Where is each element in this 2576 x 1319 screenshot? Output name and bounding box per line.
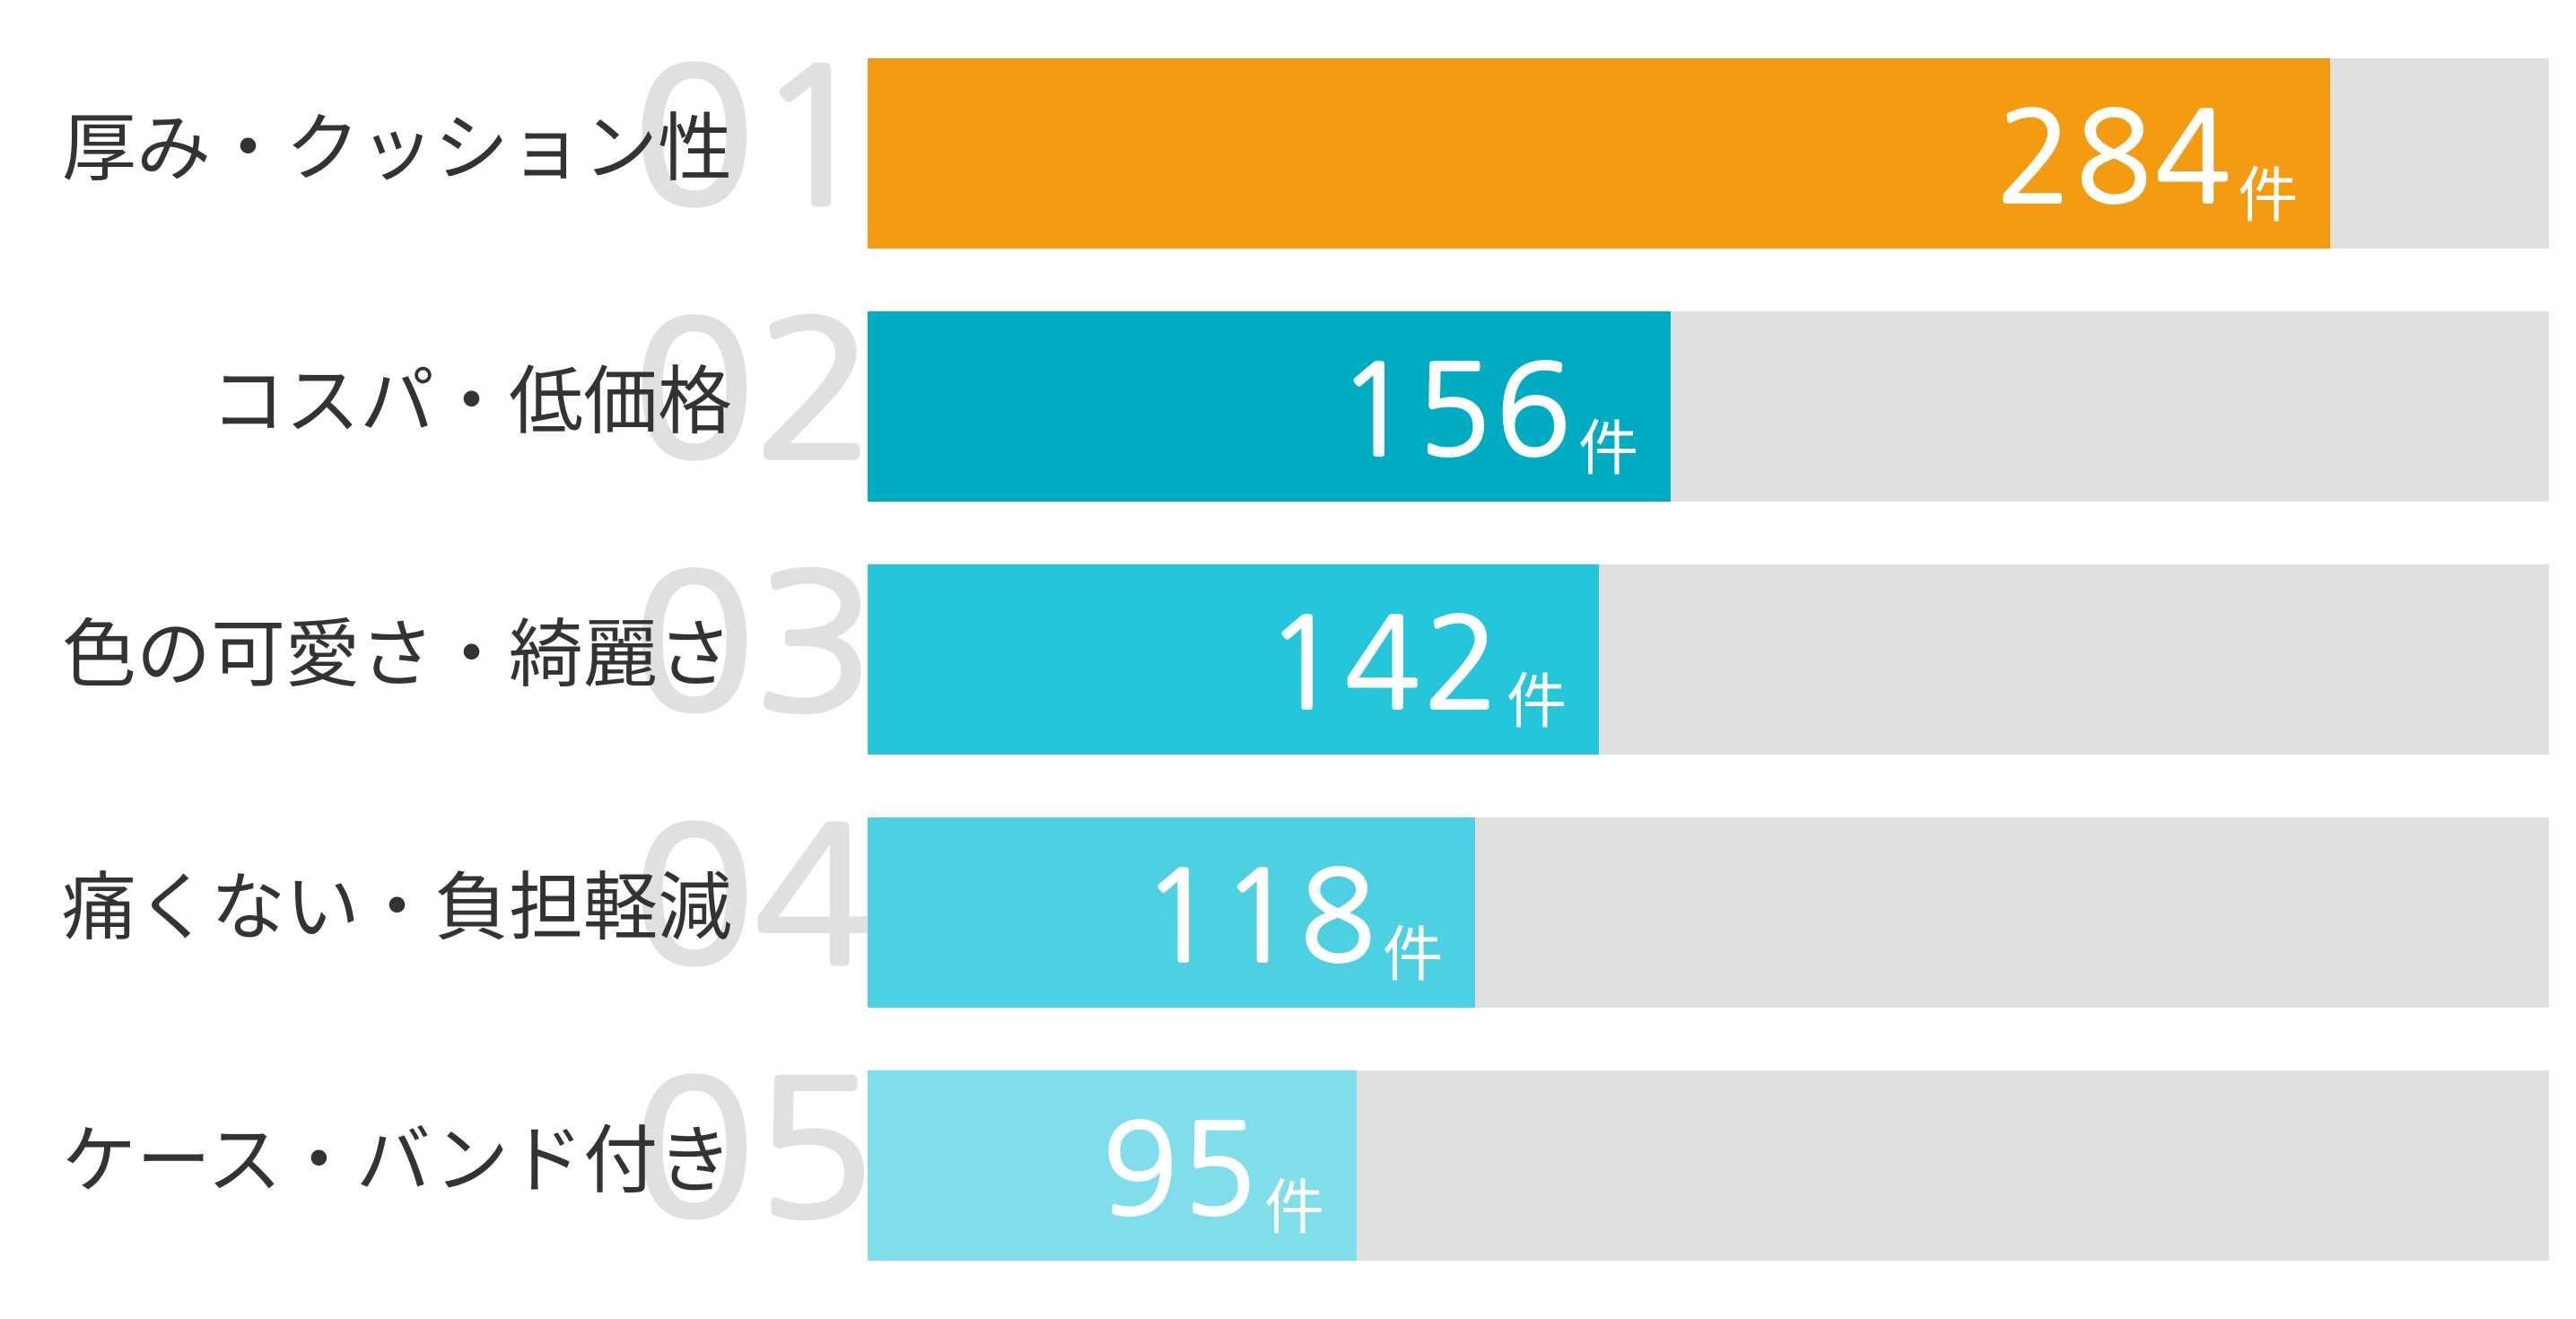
count 118: 118 [1141, 855, 1379, 980]
unit: 件 [1383, 922, 1443, 989]
unit: 件 [1578, 415, 1638, 483]
row 1: 厚み・クッション性 [62, 45, 2549, 249]
rank number 01: 01 [633, 45, 875, 231]
bar track [868, 1070, 2549, 1261]
rank number 05: 05 [633, 1057, 875, 1244]
label: 色の可愛さ・綺麗さ [62, 613, 732, 696]
unit: 件 [1506, 668, 1567, 736]
count 156: 156 [1337, 349, 1575, 474]
bar track [868, 564, 2549, 755]
bar value [868, 311, 1671, 502]
count 284: 284 [1996, 96, 2234, 221]
unit: 件 [2238, 162, 2298, 230]
rank number 02: 02 [633, 298, 875, 485]
label: 痛くない・負担軽減 [62, 866, 732, 949]
rank number 04: 04 [633, 804, 875, 991]
unit: 件 [1264, 1175, 1324, 1242]
bar track [868, 817, 2549, 1008]
row 3: 色の可愛さ・綺麗さ [62, 551, 2549, 755]
count 142: 142 [1265, 602, 1503, 727]
label: ケース・バンド付き [62, 1119, 732, 1202]
label: コスパ・低価格 [211, 360, 732, 443]
bar track [868, 58, 2549, 249]
row 4: 痛くない・負担軽減 [62, 804, 2549, 1008]
row 5: ケース・バンド付き [62, 1057, 2549, 1261]
count 95: 95 [1103, 1108, 1261, 1233]
bar value [868, 564, 1599, 755]
bar value [868, 817, 1475, 1008]
bar value [868, 1070, 1357, 1261]
row 2: コスパ・低価格 [211, 298, 2549, 502]
bar value [868, 58, 2330, 249]
rank number 03: 03 [633, 551, 875, 738]
label: 厚み・クッション性 [62, 107, 732, 190]
bar track [868, 311, 2549, 502]
